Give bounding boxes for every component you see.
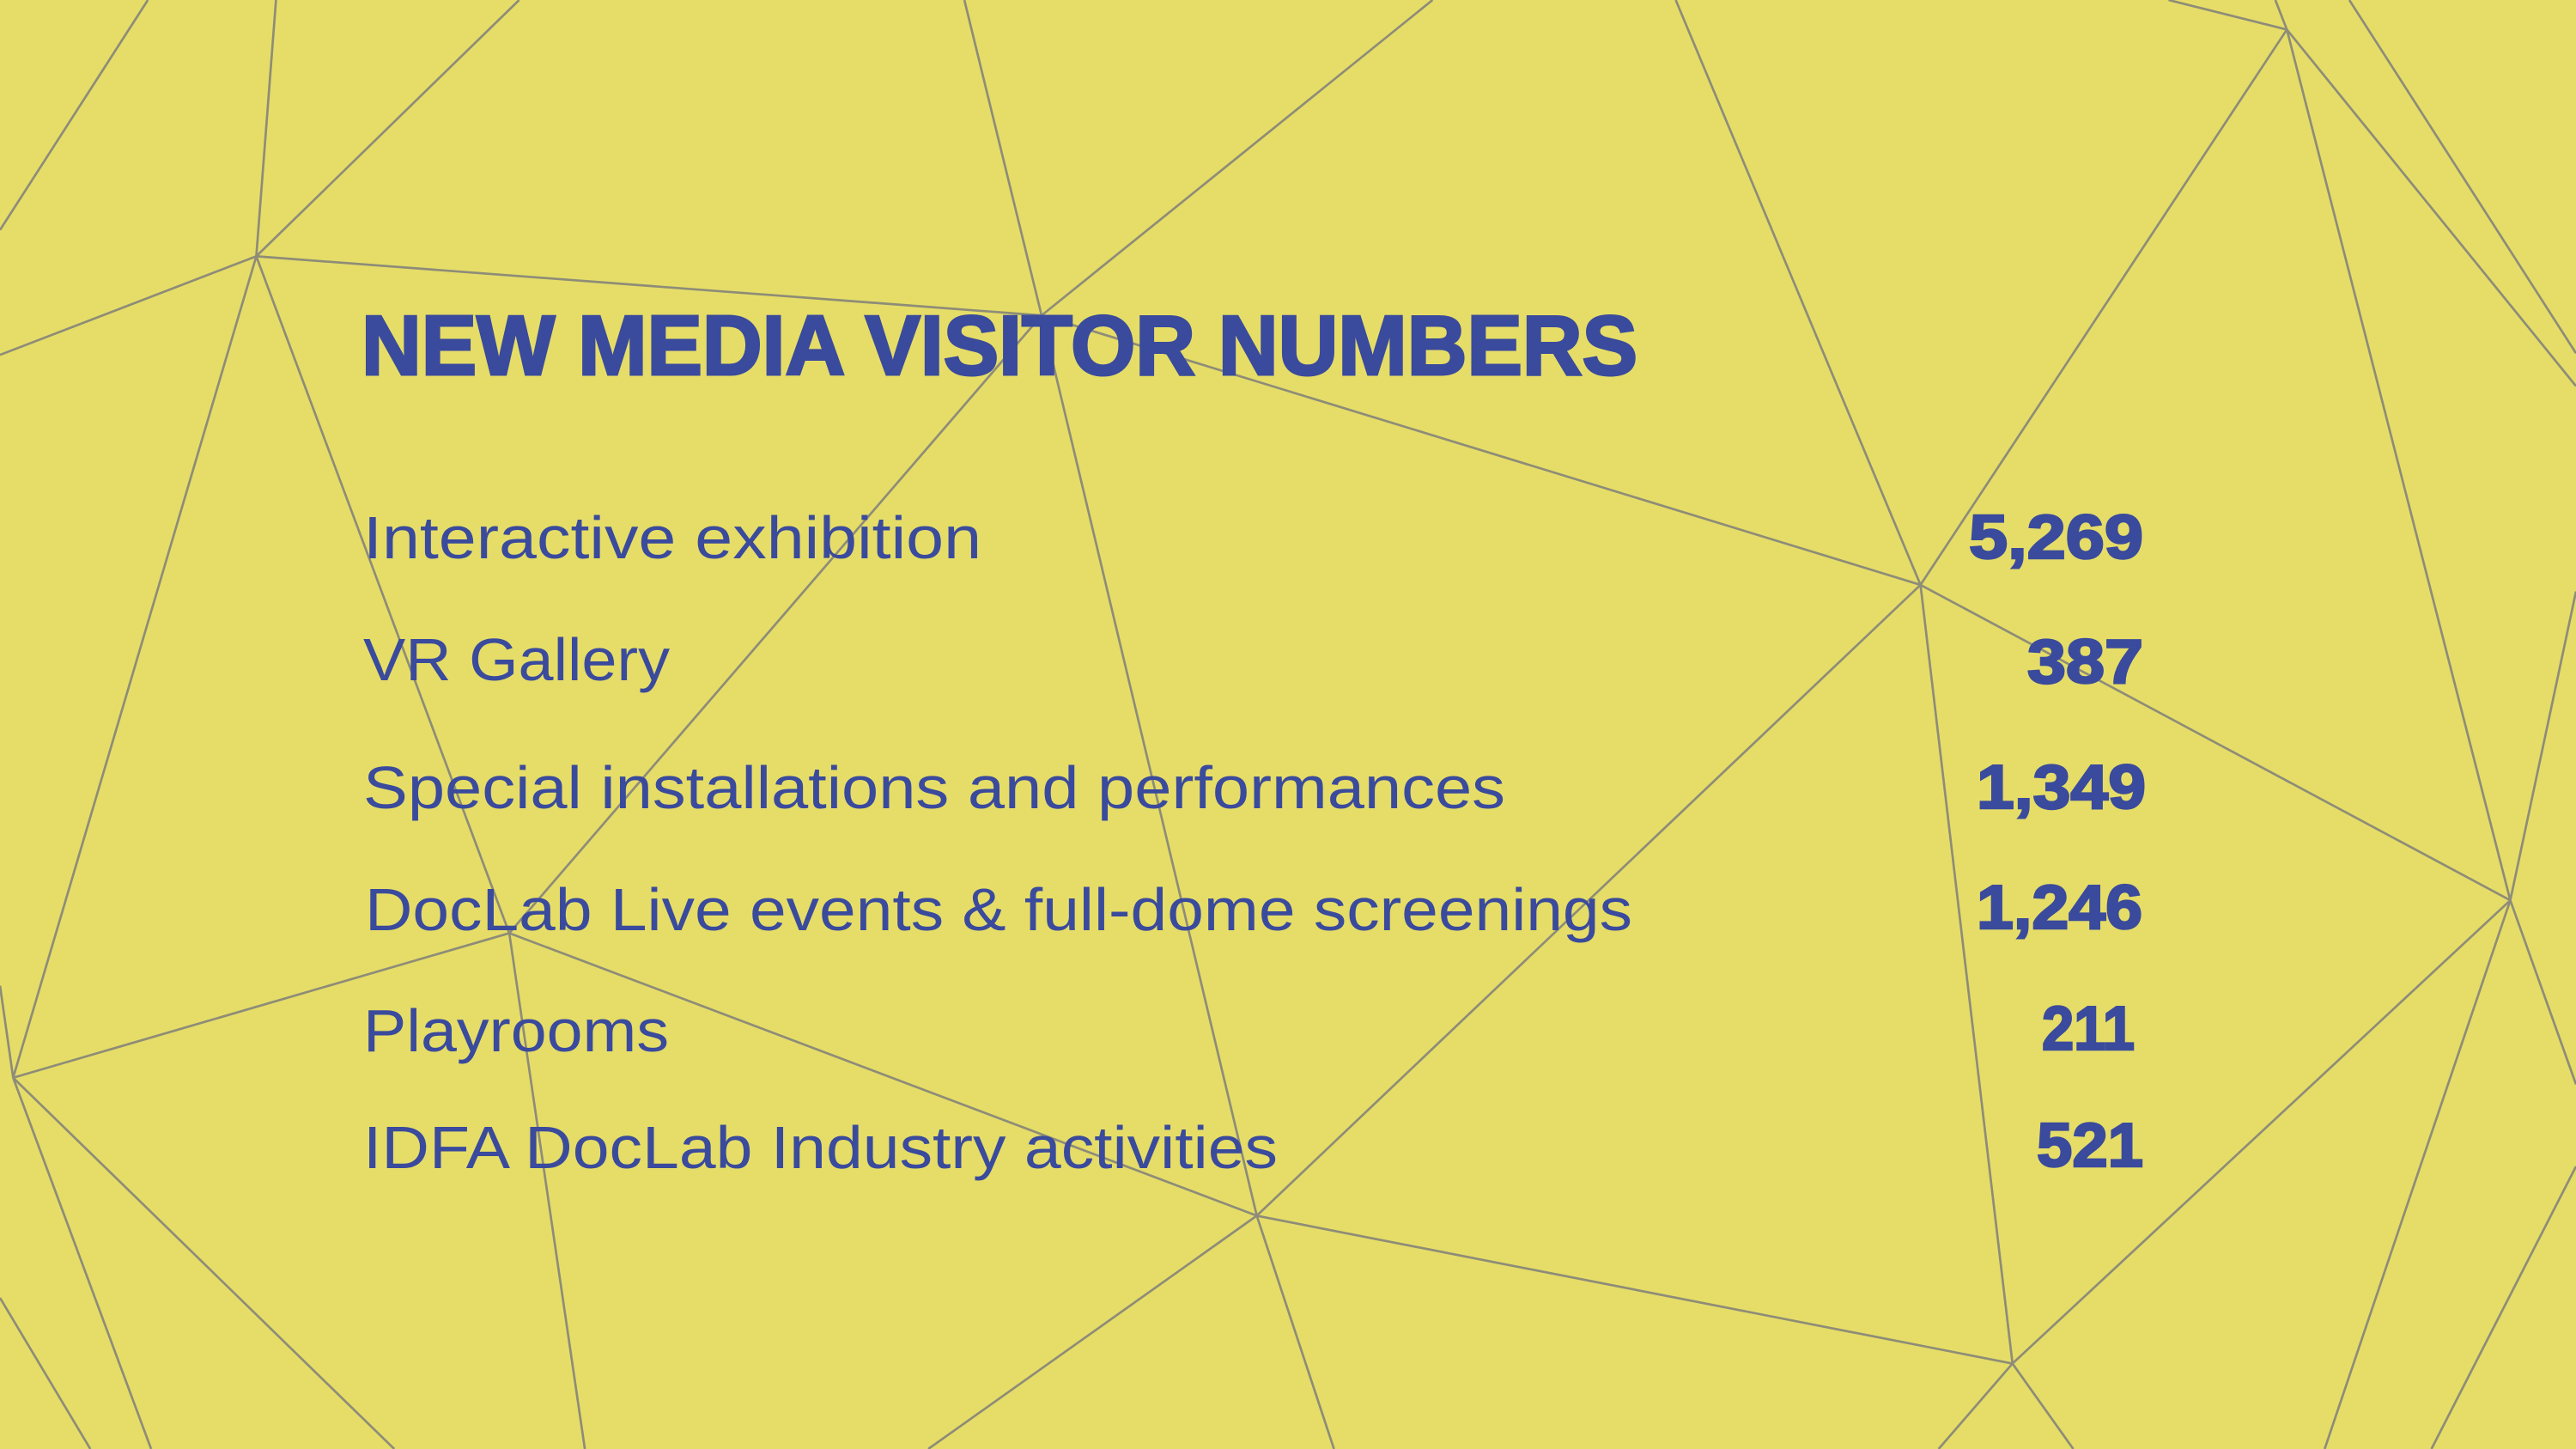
row: VR gallery (363, 626, 2143, 697)
visitor table (363, 503, 2146, 1181)
row: VR gallery: 387 (2027, 628, 2143, 697)
row: playrooms: 211 (2042, 995, 2135, 1063)
row: DocLab Live (365, 874, 2142, 943)
row: special installations (363, 753, 2146, 822)
row: special installations: 1,349 (1977, 753, 2146, 822)
row: industry activities (363, 1111, 2143, 1181)
row: DocLab Live: DocLab Live events & full-dome screenings (365, 876, 1632, 943)
row: interactive exhibition (363, 503, 2143, 572)
row: interactive exhibition: Interactive exhibition (363, 504, 981, 571)
row: DocLab Live: 1,246 (1977, 874, 2142, 942)
row: industry activities: 521 (2037, 1111, 2143, 1180)
row: special installations: Special installations and performances (363, 754, 1505, 821)
row: VR gallery: VR Gallery (363, 626, 670, 693)
row: playrooms: Playrooms (363, 997, 669, 1064)
title: NEW MEDIA VISITOR NUMBERS (361, 298, 1637, 393)
row: playrooms (363, 995, 2135, 1064)
row: industry activities: IDFA DocLab Industry activities (363, 1114, 1278, 1181)
row: interactive exhibition: 5,269 (1969, 503, 2143, 572)
